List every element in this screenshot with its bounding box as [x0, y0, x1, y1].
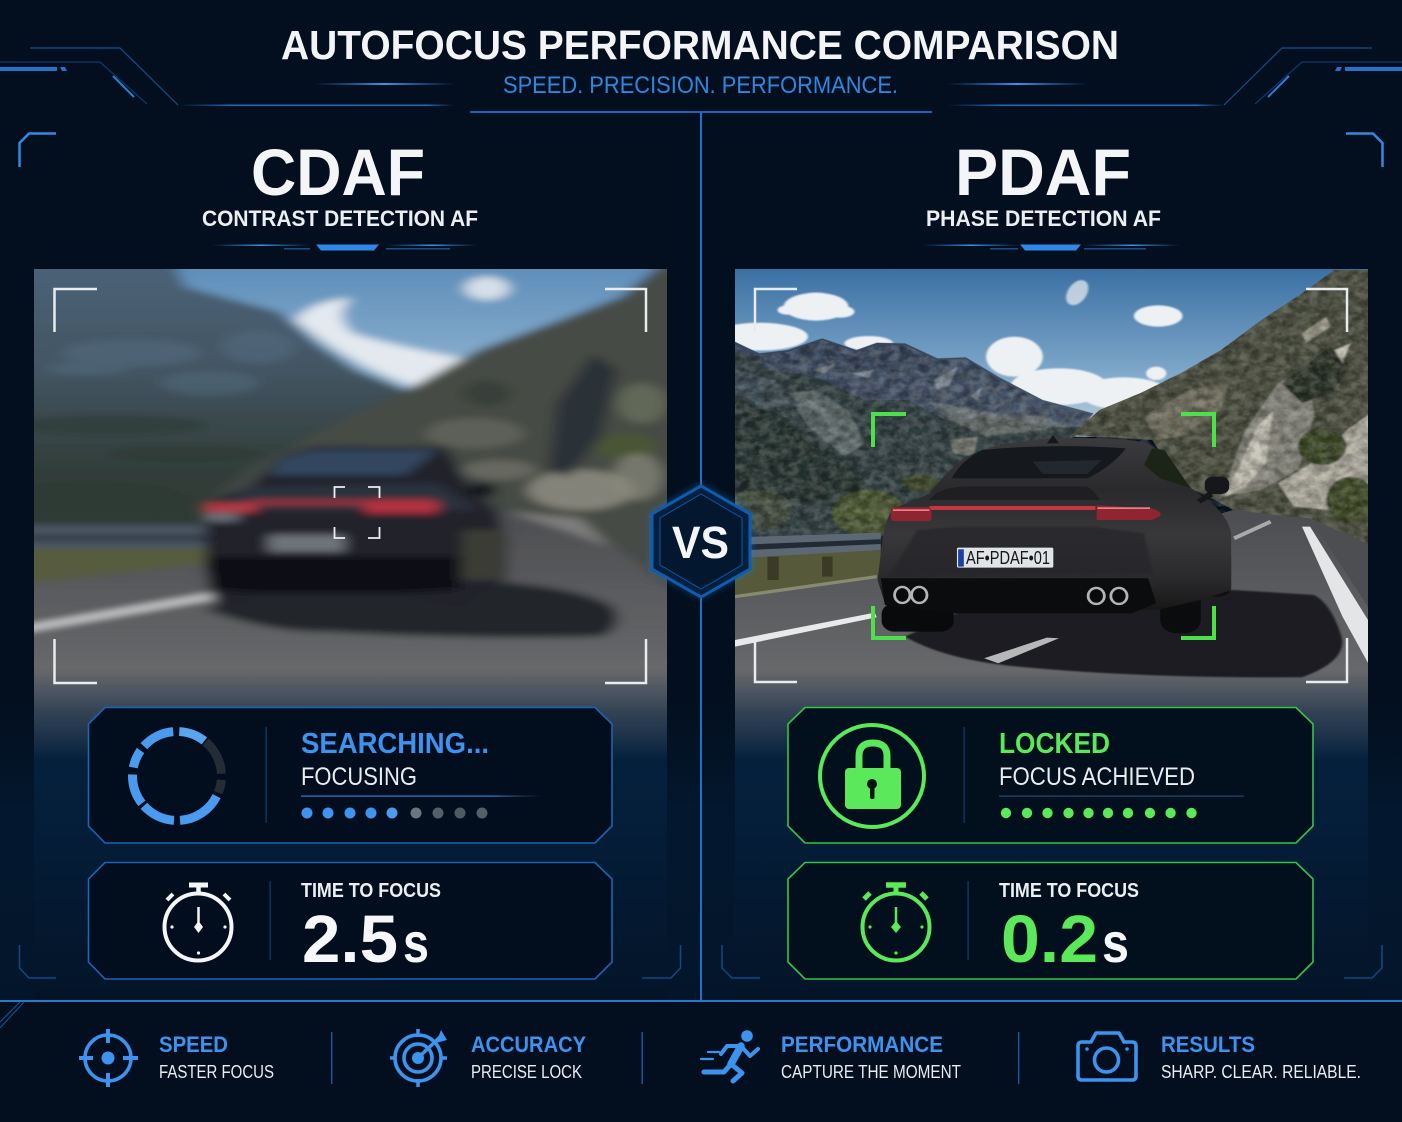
- value: 0.2s: 0.2: [1001, 902, 1098, 977]
- label: PERFORMANCE: [781, 1032, 943, 1057]
- label: RESULTS: [1161, 1032, 1255, 1057]
- label: TIME TO FOCUS: [301, 880, 441, 902]
- photo: blurred car, searching focus: [34, 269, 667, 752]
- description: FASTER FOCUS: [159, 1062, 274, 1082]
- label: SPEED: [159, 1032, 228, 1057]
- roadside vegetation: [735, 550, 881, 598]
- description: CAPTURE THE MOMENT: [781, 1062, 961, 1082]
- light bar: [929, 506, 1095, 510]
- wheels: [882, 603, 954, 632]
- spoiler: [929, 487, 1100, 500]
- panel: PDAF time to focus: [788, 862, 1313, 979]
- rear glass: [952, 446, 1126, 478]
- description: SHARP. CLEAR. RELIABLE.: [1161, 1062, 1361, 1082]
- footer: speed: [79, 1029, 274, 1087]
- lower diffuser: [881, 578, 1156, 613]
- icon: target with arrow: [390, 1029, 447, 1087]
- header frame lines: [0, 48, 1402, 113]
- status subtext: FOCUS ACHIEVED: [999, 763, 1195, 791]
- road edge line: [1302, 527, 1370, 667]
- icon: spinner: [132, 732, 222, 820]
- car shadow: [905, 590, 1342, 677]
- status subtext: FOCUSING: [301, 763, 417, 791]
- panel: CDAF heading: [202, 135, 478, 250]
- progress dots: [1001, 808, 1197, 818]
- panel: CDAF time to focus: [88, 862, 612, 979]
- number plate: [957, 548, 1053, 568]
- road: [735, 510, 1368, 752]
- near left ridge: [735, 348, 1083, 537]
- subtitle: SPEED. PRECISION. PERFORMANCE.: [503, 72, 898, 99]
- icon: stopwatch: [164, 885, 232, 960]
- clouds: [711, 277, 1183, 409]
- far mountain: [735, 338, 1094, 437]
- icon: padlock in ring: [820, 725, 924, 827]
- value: 2.5s: s: [403, 911, 429, 974]
- photo fades: [34, 670, 667, 760]
- plate text: AF•PDAF•01: [966, 548, 1050, 568]
- icon: crosshair: [79, 1029, 138, 1087]
- panel: PDAF heading: [922, 135, 1180, 250]
- label: TIME TO FOCUS: [999, 880, 1139, 902]
- heading: CDAF: CDAF: [251, 135, 425, 209]
- heading: PDAF: PDAF: [955, 135, 1131, 209]
- VS badge: VS: [672, 517, 729, 568]
- heading underline ornament: [212, 244, 478, 250]
- title: AUTOFOCUS PERFORMANCE COMPARISON: [281, 22, 1119, 68]
- photo: sharp car, locked focus: [711, 267, 1375, 783]
- status text: LOCKED: [999, 728, 1110, 760]
- panel: locked status: [788, 708, 1313, 843]
- mirror: [1205, 477, 1229, 494]
- icon: runner: [701, 1030, 758, 1081]
- value: 2.5s: 2.5: [302, 902, 398, 977]
- subheading: contrast detection: CONTRAST DETECTION AF: [202, 206, 478, 231]
- footer top rule: [0, 1000, 1402, 1002]
- antenna: [1047, 435, 1059, 443]
- rock texture: [735, 270, 1368, 544]
- icon: camera: [1078, 1033, 1136, 1080]
- description: PRECISE LOCK: [471, 1062, 582, 1082]
- focus box searching: [334, 487, 380, 538]
- status text: SEARCHING...: [301, 728, 489, 760]
- progress dots: [302, 808, 488, 818]
- footer: results: [1078, 1032, 1361, 1082]
- VS badge: [650, 484, 751, 598]
- center divider line: [700, 112, 702, 1000]
- footer: performance: [701, 1030, 961, 1082]
- label: ACCURACY: [471, 1032, 586, 1057]
- focus box locked: [873, 414, 1214, 638]
- exhausts: [895, 587, 1127, 604]
- side window: [1144, 448, 1191, 488]
- bumper recess around plate: [902, 527, 1148, 558]
- subheading: phase detection: PHASE DETECTION AF: [926, 206, 1161, 231]
- viewfinder brackets right: [755, 289, 1347, 682]
- heading underline ornament: [922, 244, 1180, 250]
- car body: [878, 438, 1231, 613]
- value: 0.2s: s: [1102, 911, 1129, 974]
- right hillside: [1071, 270, 1370, 545]
- corner brackets: [20, 134, 1382, 978]
- viewfinder brackets left: [54, 289, 646, 683]
- footer: accuracy: [390, 1029, 586, 1087]
- guardrail: [752, 532, 881, 558]
- icon: stopwatch: [862, 885, 930, 960]
- panel: searching status: [88, 708, 612, 843]
